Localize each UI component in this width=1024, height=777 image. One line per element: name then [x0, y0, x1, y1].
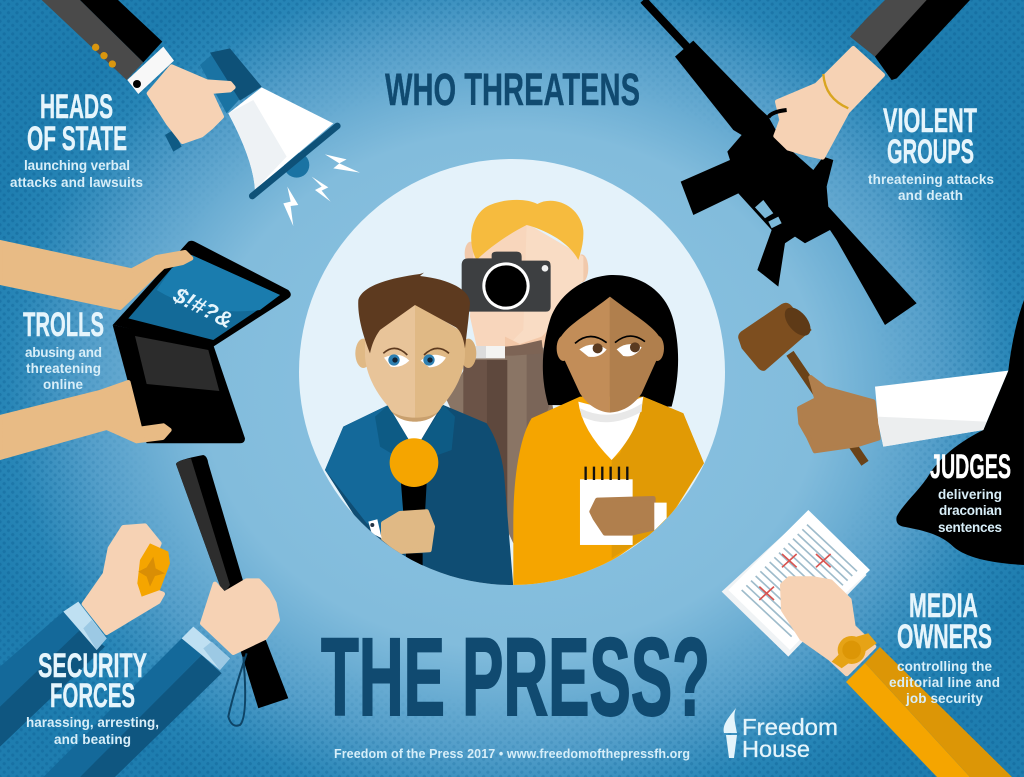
label: judges [930, 448, 1011, 535]
label: media owners [889, 587, 1000, 706]
central circle with three journalists [299, 159, 725, 587]
lower arm [0, 382, 169, 458]
panel: security forces illustration [0, 455, 288, 777]
label: judges: delivering [938, 487, 1002, 502]
sleeve [846, 647, 1012, 777]
label: heads of state [10, 88, 143, 190]
label: security forces: and beating [54, 732, 131, 747]
baton [176, 455, 288, 726]
laptop [113, 241, 291, 443]
label: security forces: FORCES [50, 677, 135, 715]
lightning marks [283, 154, 360, 226]
camera [462, 252, 551, 312]
hand [799, 377, 878, 451]
label: heads of state: OF STATE [27, 120, 127, 158]
label: heads of state: launching verbal [24, 158, 130, 173]
hand [782, 579, 874, 674]
heading: who threatens: WHO THREATENS [385, 64, 640, 115]
label: media owners: controlling the [897, 659, 992, 674]
sleeve [850, 0, 970, 80]
panel: trolls illustration [0, 241, 291, 458]
label: security forces: harassing, arresting, [26, 715, 159, 730]
papers [722, 510, 870, 657]
label: security forces: SECURITY [38, 647, 147, 685]
upper arm [0, 242, 191, 308]
screen text: $!#?& [168, 282, 237, 333]
sleeve [42, 0, 174, 94]
logo: freedom house: Freedom [742, 714, 838, 740]
label: media owners: editorial line and [889, 675, 1000, 690]
panel: violent groups illustration [643, 0, 970, 325]
label: violent groups: and death [898, 188, 963, 203]
gavel [738, 303, 865, 463]
label: heads of state: attacks and lawsuits [10, 175, 143, 190]
rifle [643, 0, 917, 325]
label: trolls: TROLLS [23, 306, 104, 344]
label: trolls [23, 306, 104, 392]
label: trolls: abusing and [25, 345, 102, 360]
logo: freedom house [724, 708, 838, 762]
footer source line: Freedom of the Press 2017 • www.freedomofthepressfh.org [334, 747, 690, 761]
hand [768, 48, 883, 157]
label: heads of state: HEADS [40, 88, 113, 126]
left sleeve [0, 612, 82, 707]
label: trolls: online [43, 377, 83, 392]
right hand [182, 581, 278, 670]
left hand with badge [63, 526, 170, 650]
label: media owners: job security [905, 691, 983, 706]
label: violent groups [868, 102, 994, 203]
panel: media owners illustration [722, 510, 1012, 777]
microphone [383, 438, 438, 567]
logo: freedom house: House [742, 736, 810, 762]
photographer [447, 200, 588, 543]
panel: judges illustration [738, 300, 1024, 565]
hand [149, 67, 233, 142]
label: violent groups: threatening attacks [868, 172, 994, 187]
reporter man [325, 273, 513, 587]
notepad [580, 467, 633, 545]
reporter woman [513, 275, 704, 587]
watch [832, 633, 877, 668]
label: judges: draconian [939, 503, 1002, 518]
megaphone [165, 48, 337, 196]
heading: the press: THE PRESS? [321, 616, 710, 739]
label: security forces [26, 647, 159, 747]
label: media owners: MEDIA [909, 587, 978, 625]
label: trolls: threatening [26, 361, 101, 376]
sleeve [875, 371, 1008, 447]
robe [896, 300, 1024, 565]
right sleeve [43, 638, 202, 777]
panel: heads of state illustration [42, 0, 360, 226]
label: judges: sentences [938, 520, 1002, 535]
